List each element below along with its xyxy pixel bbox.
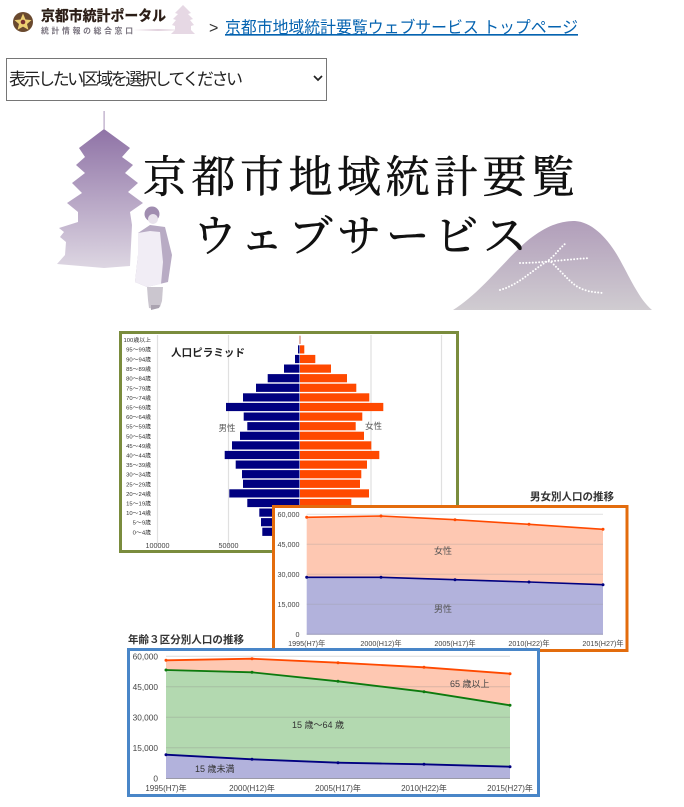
breadcrumb link [209,17,578,37]
age labels [123,336,151,536]
age labels: 100歳以上 [123,336,151,344]
x axis labels: 2015(H27)年 [487,783,533,793]
heading: population by sex: 男女別人口の推移 [530,490,614,503]
area: under 15 [166,755,510,778]
daimonji dotted character [500,243,602,293]
line: under 15 [166,755,510,767]
icon: city crest [13,12,33,32]
hero banner [57,111,652,310]
x axis labels: 2005(H17)年 [434,639,476,648]
line: female [307,516,603,529]
x axis labels: 2000(H12)年 [229,783,275,793]
female bars [300,336,383,507]
x axis labels: 2010(H22)年 [508,639,550,648]
y axis labels: 30,000 [133,712,158,722]
area: 15 to 64 [166,670,510,767]
y axis labels: 0 [153,774,158,784]
y axis labels: 45,000 [133,682,158,692]
breadcrumb separator: > [209,20,218,37]
main title line 2: ウェブサービス [193,212,527,261]
line: male [307,577,603,585]
x axis labels: 2000(H12)年 [360,639,402,648]
y axis labels: 15,000 [133,743,158,753]
age labels: 20～24歳 [126,490,151,498]
illustration: maiko figure [135,206,172,310]
y axis labels [278,510,300,639]
label: under 15: 15 歳未満 [195,763,235,774]
logo name: 京都市統計ポータル [41,7,166,25]
x axis labels: 2010(H22)年 [401,783,447,793]
pyramid axis labels [146,541,238,550]
area: female [307,516,603,585]
link text: 京都市地域統計要覧ウェブサービス トップページ [225,17,578,37]
line: 65 and over [166,659,510,674]
label: 65 and over: 65 歳以上 [450,678,490,689]
age labels: 70～74歳 [126,394,151,402]
age labels: 95～99歳 [126,346,151,354]
line: 15 to 64 [166,670,510,705]
y axis labels: 30,000 [278,570,300,579]
logo tagline: 統計情報の総合窓口 [41,26,133,36]
area select dropdown [6,58,326,100]
pyramid axis labels: 100000 [146,541,169,550]
x axis labels [288,639,624,648]
x axis labels [145,783,533,793]
panel: population pyramid [120,332,458,552]
age labels: 80～84歳 [126,374,151,382]
female label: 女性 [434,545,452,556]
pyramid title: 人口ピラミッド [171,347,245,359]
y axis labels: 0 [296,630,300,639]
age labels: 45～49歳 [126,442,151,450]
label: 15 to 64: 15 歳～64 歳 [292,719,344,730]
x axis labels: 2015(H27)年 [582,639,624,648]
y axis labels: 45,000 [278,540,300,549]
illustration: mountain with daimonji [453,221,652,310]
illustration: pagoda [57,111,143,268]
female label: 女性 [365,421,383,431]
y axis labels: 60,000 [278,510,300,519]
area: 65 and over [166,659,510,705]
age labels: 30～34歳 [126,470,151,478]
age labels: 0～4歳 [133,528,151,536]
x axis labels: 2005(H17)年 [315,783,361,793]
icon: chevron [314,76,322,80]
age labels: 35～39歳 [126,461,151,469]
age labels: 15～19歳 [126,500,151,508]
age labels: 5～9歳 [133,518,151,526]
age labels: 40～44歳 [126,452,151,460]
male label: 男性 [218,423,236,433]
age labels: 25～29歳 [126,480,151,488]
age labels: 90～94歳 [126,356,151,364]
age labels: 85～89歳 [126,365,151,373]
icon: small pagoda [133,5,195,34]
male label: 男性 [434,603,452,614]
pyramid axis labels: 50000 [218,541,238,550]
x axis labels: 1995(H7)年 [288,639,325,648]
panel: population by sex [274,506,627,650]
age labels: 10～14歳 [126,509,151,517]
panel: population by age group [128,650,538,796]
age labels: 75～79歳 [126,384,151,392]
dropdown text: 表示したい区域を選択してください [9,70,243,89]
y axis labels: 60,000 [133,652,158,662]
heading: population by age group: 年齢３区分別人口の推移 [128,633,244,646]
male bars [225,345,300,536]
x axis labels: 1995(H7)年 [145,783,187,793]
age labels: 50～54歳 [126,432,151,440]
age labels: 65～69歳 [126,404,151,412]
portal logo [13,5,195,36]
y axis labels [133,652,158,784]
y axis labels: 15,000 [278,600,300,609]
age labels: 60～64歳 [126,413,151,421]
age labels: 55～59歳 [126,422,151,430]
area: male [307,577,603,634]
main title line 1: 京都市地域統計要覧 [143,153,575,202]
